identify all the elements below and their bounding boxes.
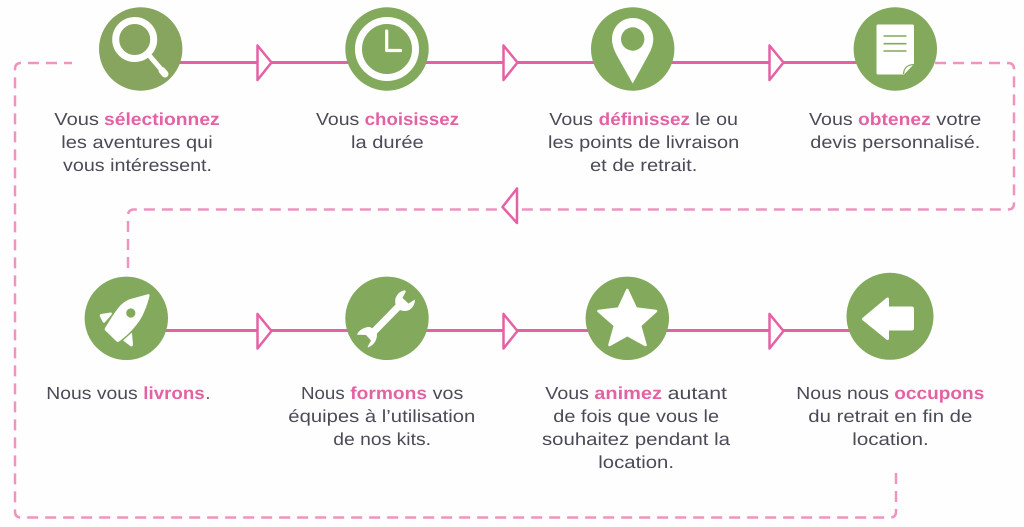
text: step 4: votre xyxy=(936,109,981,129)
arrow: step 1 to 2 xyxy=(258,46,272,80)
text: step 6: vos xyxy=(433,383,464,403)
text: step 7 xyxy=(542,383,730,472)
text: step 6 xyxy=(288,383,475,449)
arrow: step 5 to 6 xyxy=(258,314,272,348)
icon: wrench xyxy=(345,277,429,360)
arrow: step 7 to 8 xyxy=(770,314,784,348)
text: step 6: équipes à l’utilisation xyxy=(288,406,475,426)
text: step 4: Vous xyxy=(809,109,853,129)
text: step 1: sélectionnez xyxy=(104,109,220,129)
icon: star xyxy=(586,277,669,360)
text: step 3: définissez xyxy=(599,109,690,129)
arrow: row connector pointing left xyxy=(502,188,517,223)
connector line: row one xyxy=(175,61,860,64)
text: step 2: Vous xyxy=(316,109,360,129)
icon: left arrow xyxy=(846,273,934,360)
text: step 3: les points de livraison xyxy=(548,132,739,152)
text: step 3: Vous xyxy=(549,109,593,129)
connector line: row two xyxy=(160,329,860,332)
text: step 8: du retrait en fin de xyxy=(808,406,972,426)
text: step 2: la durée xyxy=(351,132,424,152)
icon: location pin xyxy=(591,7,674,91)
text: step 1: les aventures qui xyxy=(61,132,213,152)
text: step 8 xyxy=(796,383,985,449)
text: step 4 xyxy=(809,109,981,152)
text: step 4: devis personnalisé. xyxy=(810,132,980,152)
text: step 1 xyxy=(54,109,220,175)
text: step 4: obtenez xyxy=(858,109,931,129)
arrow: step 3 to 4 xyxy=(770,46,784,80)
text: step 6: Nous xyxy=(301,383,345,403)
icon: magnifying glass xyxy=(99,7,182,91)
text: step 3: et de retrait. xyxy=(590,155,697,175)
text: step 2: choisissez xyxy=(365,109,459,129)
text: step 3 xyxy=(548,109,739,175)
text: step 3: le ou xyxy=(695,109,738,129)
text: step 5 xyxy=(46,383,210,403)
text: step 5: . xyxy=(206,383,210,403)
arrow: step 6 to 7 xyxy=(504,314,518,348)
text: step 6: formons xyxy=(350,383,427,403)
text: step 1: Vous xyxy=(54,109,99,129)
icon: rocket xyxy=(85,277,168,360)
text: step 5: livrons xyxy=(143,383,205,403)
text: step 8: occupons xyxy=(894,383,985,403)
dashed connector: final step back to start xyxy=(15,63,896,518)
text: step 7: location. xyxy=(598,452,674,472)
text: step 8: location. xyxy=(852,429,929,449)
text: step 7: Vous xyxy=(545,383,589,403)
text: step 5: Nous vous xyxy=(46,383,138,403)
text: step 6: de nos kits. xyxy=(333,429,431,449)
text: step 7: autant xyxy=(668,383,727,403)
text: step 7: animez xyxy=(594,383,662,403)
text: step 8: Nous nous xyxy=(796,383,889,403)
text: step 7: de fois que vous le xyxy=(553,406,719,426)
icon: clock xyxy=(345,7,429,91)
icon: document xyxy=(854,7,937,91)
arrow: step 2 to 3 xyxy=(504,46,518,80)
dashed connector: row one to row two xyxy=(128,63,1014,270)
text: step 7: souhaitez pendant la xyxy=(542,429,730,449)
text: step 2 xyxy=(316,109,459,152)
text: step 1: vous intéressent. xyxy=(63,155,212,175)
